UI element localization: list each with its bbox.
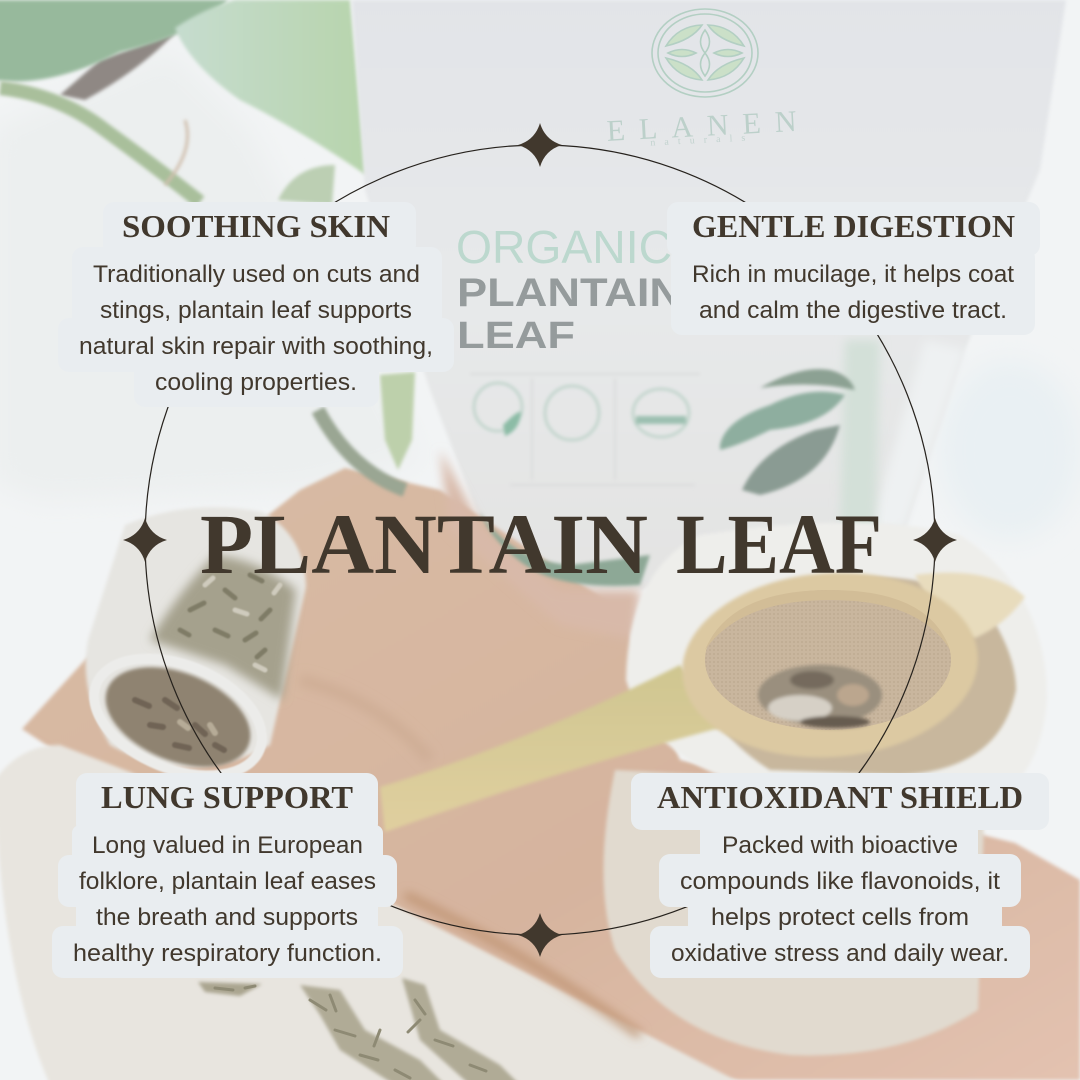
text: soothing skin description (79, 261, 433, 396)
text: gentle digestion description: Rich in mucilage, it helps coat (692, 261, 1014, 288)
scattered herbs (198, 978, 520, 1080)
panel: gentle digestion (667, 202, 1040, 335)
panel: lung support (52, 773, 403, 978)
title: PLANTAIN (200, 496, 648, 592)
bag badges (470, 374, 700, 485)
pot on the left (0, 50, 420, 500)
star right (913, 518, 957, 562)
title: LEAF (676, 496, 882, 592)
stem and leaf mid (318, 410, 405, 490)
background photo: ORGANIC (456, 221, 672, 273)
text: gentle digestion description (692, 261, 1014, 324)
text: antioxidant shield description: compounds like flavonoids, it (680, 868, 1000, 895)
circle ring (145, 145, 935, 935)
heading: antioxidant shield: ANTIOXIDANT SHIELD (657, 779, 1023, 815)
bag (352, 0, 1066, 590)
bag logo (652, 9, 758, 97)
text: soothing skin description: stings, plantain leaf supports (100, 297, 412, 324)
heading: soothing skin: SOOTHING SKIN (122, 208, 390, 244)
text: lung support description: Long valued in European (92, 832, 363, 859)
bag strip (480, 512, 650, 586)
right blue smudge (940, 360, 1080, 540)
panel: antioxidant shield (631, 773, 1049, 978)
cup body (604, 770, 985, 1055)
star top (518, 123, 562, 167)
bag print text: ELANEN (606, 105, 797, 148)
stems (0, 88, 200, 202)
cup rim (626, 522, 1047, 800)
text: antioxidant shield description (671, 832, 1009, 967)
text: lung support description: folklore, plantain leaf eases (79, 868, 376, 895)
strainer tab (915, 573, 1025, 638)
herbs in strainer (758, 665, 882, 728)
marble plate (0, 745, 745, 1080)
strainer handle (380, 665, 730, 832)
text: soothing skin description: cooling properties. (155, 369, 357, 396)
star bottom (518, 913, 562, 957)
wooden board (22, 468, 1080, 1080)
text: antioxidant shield description: Packed with bioactive (722, 832, 958, 859)
text: lung support description: the breath and supports (96, 904, 358, 931)
strainer (676, 563, 984, 767)
heading: lung support: LUNG SUPPORT (101, 779, 353, 815)
text: gentle digestion description: and calm the digestive tract. (699, 297, 1007, 324)
text: lung support description: healthy respiratory function. (73, 940, 382, 967)
bag leaf art (720, 340, 880, 535)
text: antioxidant shield description: oxidative stress and daily wear. (671, 940, 1009, 967)
leaves top left (0, 0, 228, 81)
title (200, 496, 882, 592)
background photo: PLANTAIN (457, 271, 682, 315)
panel: soothing skin (58, 202, 454, 407)
jar (77, 507, 306, 798)
star left (123, 518, 167, 562)
text: antioxidant shield description: helps protect cells from (711, 904, 969, 931)
tea (699, 578, 1016, 775)
text: soothing skin description: natural skin repair with soothing, (79, 333, 433, 360)
text: soothing skin description: Traditionally used on cuts and (93, 261, 420, 288)
background photo: LEAF (457, 315, 575, 357)
background photo: naturals (650, 133, 746, 149)
heading: gentle digestion: GENTLE DIGESTION (692, 208, 1015, 244)
text: lung support description (73, 832, 382, 967)
dark pot rim (60, 33, 175, 100)
